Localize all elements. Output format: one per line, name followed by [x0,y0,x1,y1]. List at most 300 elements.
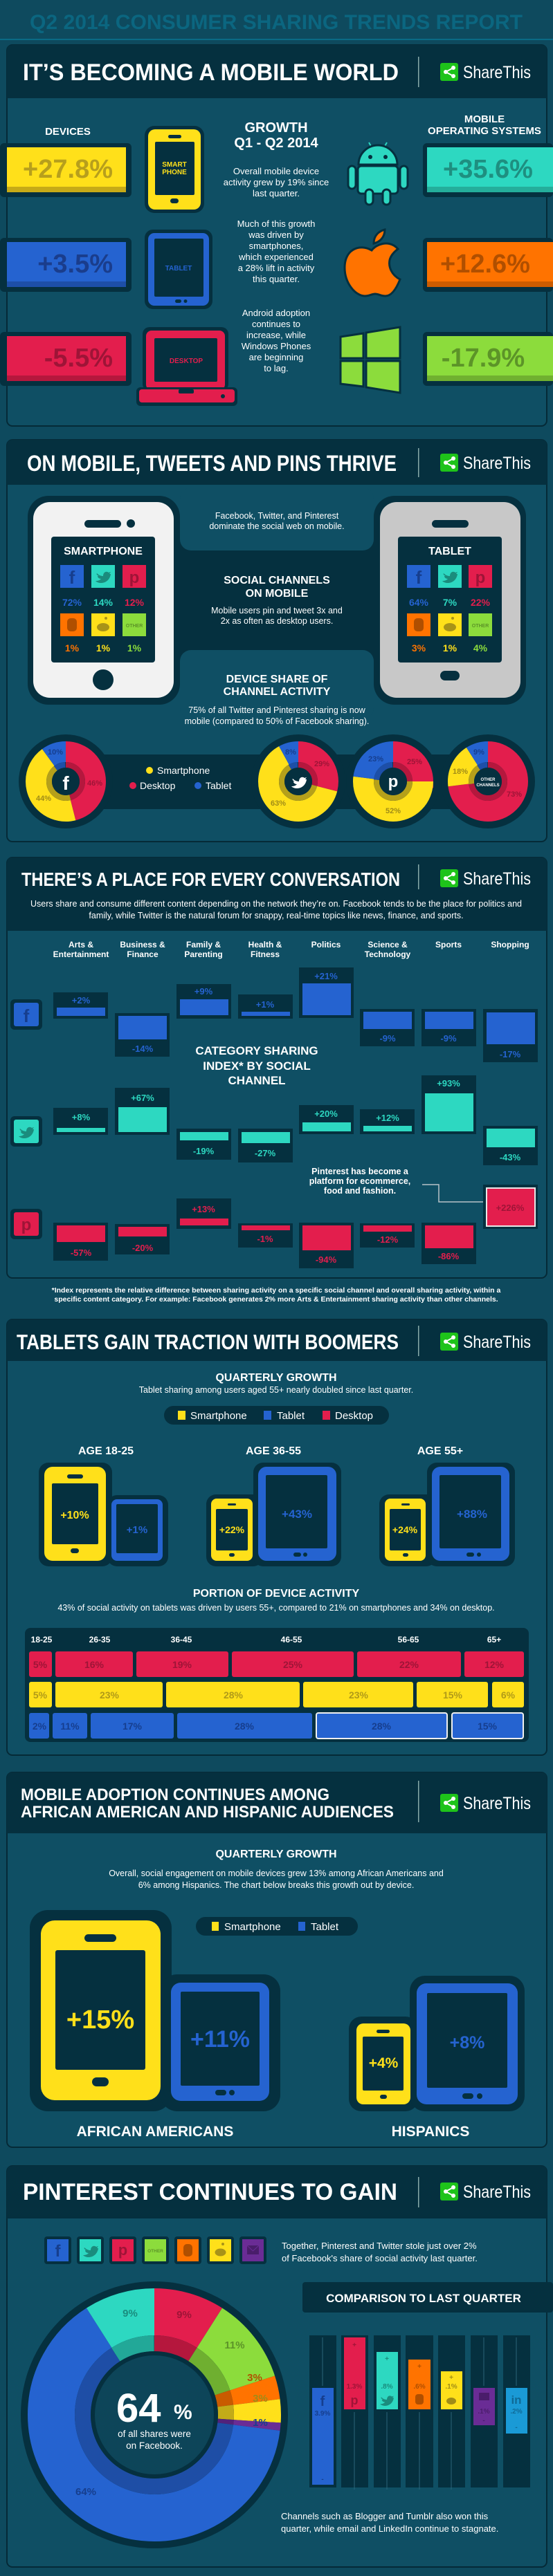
group labels: HISPANICS [392,2124,469,2140]
age labels: AGE 36-55 [246,1445,301,1457]
donut: share of all activity: % [174,2401,192,2424]
phone: smartphone channels: 1% [65,642,80,654]
devices: age 55+: +88% [457,1508,487,1521]
bar chart: change vs last quarter: - [321,2476,324,2483]
bar chart: change vs last quarter: p [350,2393,359,2407]
donut: share of all activity: 9% [176,2309,192,2321]
text: smartphone driven: Much of this growth [237,219,315,229]
table: age share by device: 22% [399,1659,419,1670]
chart: facebook index: +2% [72,995,91,1006]
logo: ShareThis: ShareThis [463,63,531,82]
text: smartphone driven: which experienced [238,252,314,262]
category labels: Shopping [491,940,529,949]
devices: hispanics: +4% [369,2055,399,2071]
phone: tablet channels: 7% [443,597,457,608]
text: social channels on mobile: SOCIAL CHANNELS [224,575,330,586]
bar: tablet +3.5%: +3.5% [37,250,113,279]
chart: pinterest index: +13% [192,1204,215,1214]
devices: age 36-55: +43% [282,1508,312,1521]
panel: boomers [7,1319,547,1755]
icon row: channels: OTHER [147,2249,163,2254]
text: dominate social web [209,511,345,531]
text: blogger and tumblr: quarter, while email and LinkedIn continue to stagnate. [281,2523,498,2534]
table: age share by device: 5% [33,1689,48,1701]
donut: pinterest: p [388,772,398,791]
devices: african americans: +15% [66,2005,134,2035]
table: age share by device: 36-45 [171,1635,192,1644]
table: age share by device: 65+ [487,1635,501,1644]
chart: facebook index: +1% [256,999,275,1010]
text: smartphone driven: this quarter. [253,274,300,284]
table: age share by device: 12% [484,1659,505,1670]
donut band [19,734,535,828]
text: portion of device activity: PORTION OF DEVICE ACTIVITY [193,1588,359,1600]
category labels [53,940,529,959]
text: social channels on mobile [211,575,343,626]
icon: desktop [136,327,237,406]
donut: share of all activity: 1% [253,2417,268,2429]
donut: other channels: 18% [453,768,468,776]
devices: hispanics: +8% [450,2033,484,2053]
legend: device colors: Desktop [140,780,176,791]
donut: facebook: 46% [87,779,102,788]
bar chart: change vs last quarter: + [417,2363,421,2371]
logo: ShareThis [440,1333,531,1352]
phone: tablet channels: p [475,568,485,587]
icon: pinterest row [10,1209,42,1239]
text: overall growth: last quarter. [253,188,300,198]
donut: share of all activity: 3% [253,2393,268,2404]
legend: smartphone tablet [196,1917,358,1936]
header: mobile adoption: AFRICAN AMERICAN AND HISPANIC AUDIENCES [21,1803,394,1822]
bar chart: change vs last quarter: in [511,2393,522,2407]
icon: pinterest row: p [21,1216,31,1234]
legend: smartphone tablet: Smartphone [224,1921,281,1933]
donut: share of all activity: 3% [247,2372,262,2384]
header: mobile world: IT’S BECOMING A MOBILE WORLD [23,59,399,86]
text: social channels on mobile: Mobile users pin and tweet 3x and [211,606,343,615]
phone: smartphone channels: 14% [93,597,114,608]
chart title: category sharing index: INDEX* BY SOCIAL [203,1059,311,1073]
chart: facebook index: -17% [500,1049,521,1059]
subtitle: Users share and consume different content depending on the network they’re on. Facebook tends to be the place for politics and [30,899,522,909]
donut: twitter [269,748,329,811]
header: tweets and pins [7,440,547,485]
chart: pinterest index: -1% [257,1234,273,1244]
category labels: Family & [186,940,221,949]
text: dominate social web: dominate the social web on mobile. [209,521,345,531]
devices: age 18-25: +10% [60,1510,89,1521]
bar chart: change vs last quarter: - [515,2424,518,2431]
devices: age 36-55 [206,1463,341,1566]
logo: ShareThis: ShareThis [463,2183,531,2202]
devices: age 55+: +24% [392,1524,418,1535]
bar: apple +12.6%: +12.6% [440,250,530,279]
bar chart: change vs last quarter: .1% [478,2408,490,2416]
table: age share by device [25,1628,529,1742]
text: android adoption: to lag. [264,363,289,373]
text: quarterly growth: Overall, social engagement on mobile devices grew 13% among African Americans and [109,1869,444,1878]
group labels: AFRICAN AMERICANS [77,2124,233,2140]
chart: facebook index: -14% [132,1044,154,1054]
panel: tweets and pins [7,440,547,842]
header: mobile adoption: MOBILE ADOPTION CONTINUES AMONG [21,1786,329,1804]
bar: desktop -5.5% [0,332,132,386]
chart: twitter index: +93% [437,1078,460,1088]
donut: facebook: f [62,772,69,794]
text: portion of device activity: 43% of social activity on tablets was driven by users 55+, compared to 21% on smartphones and 34% on desktop. [57,1603,495,1613]
chart: pinterest index: -57% [71,1248,92,1258]
table: age share by device: 28% [372,1721,392,1732]
header: boomers [7,1319,547,1361]
icon: twitter row [10,1116,42,1147]
donut: pinterest [363,752,423,815]
text: device share of channel activity: 75% of all Twitter and Pinterest sharing is now [188,705,366,715]
phone: smartphone channels: 1% [96,642,111,654]
chart: facebook index: -9% [379,1033,396,1044]
header: tweets and pins: ON MOBILE, TWEETS AND PINS THRIVE [27,451,397,476]
subtitle: family, while Twitter is the natural forum for snappy, real-time topics like news, finance, and sports. [89,911,464,920]
chart: twitter index: +12% [376,1113,399,1123]
chart: twitter index: -43% [500,1152,521,1162]
callout: pinterest ecommerce: platform for ecommerce, [309,1176,410,1186]
age labels: AGE 18-25 [78,1445,134,1457]
table: age share by device: 11% [60,1721,80,1732]
chart: facebook index: -9% [440,1033,457,1044]
text: device share of channel activity: DEVICE SHARE OF [226,674,328,685]
legend: smartphone tablet: Tablet [311,1921,339,1933]
bar chart: change vs last quarter: 1.3% [347,2383,363,2391]
donut: other channels: CHANNELS [476,784,500,788]
category labels: Science & [368,940,408,949]
icon: smartphone: SMART [162,161,187,169]
text: portion of device activity [57,1588,495,1613]
table: age share by device: 5% [33,1659,48,1670]
category labels: Arts & [69,940,93,949]
group labels [77,2124,469,2140]
callout: pinterest ecommerce: food and fashion. [324,1186,396,1196]
chart: twitter index: -19% [193,1146,215,1156]
logo: ShareThis: ShareThis [463,454,531,473]
footnote [52,1286,501,1304]
phone: smartphone channels: f [69,567,75,588]
chart: pinterest index [53,1185,538,1268]
heading: comparison to last quarter [302,2282,553,2313]
text: smartphone driven [237,219,315,284]
phone: smartphone channels: OTHER [126,624,143,629]
table: age share by device: 19% [172,1659,192,1670]
text: device share of channel activity [185,674,369,726]
legend: device colors: Smartphone [190,1410,247,1422]
devices: age 55+ [379,1463,515,1566]
chart: twitter index: +20% [314,1109,338,1119]
chart: facebook index: +9% [194,986,213,997]
logo: ShareThis [440,2183,531,2202]
text: device share of channel activity: mobile (compared to 50% of Facebook sharing). [185,716,369,726]
devices: age 18-25 [39,1463,168,1566]
header: every conversation: THERE’S A PLACE FOR EVERY CONVERSATION [21,869,400,890]
text: quarterly growth [139,1372,413,1395]
donut: other channels [453,748,522,811]
table: age share by device: 23% [100,1689,120,1701]
mobile OS label [428,113,541,137]
chart: twitter index: +8% [72,1112,91,1122]
bar chart: change vs last quarter [309,2335,530,2490]
bar chart: change vs last quarter: .1% [445,2383,457,2391]
icon: smartphone: PHONE [162,169,187,176]
phone: tablet channels [374,496,526,705]
devices label: DEVICES [45,126,91,138]
chart: pinterest index: -94% [316,1254,337,1265]
devices: hispanics [349,1976,525,2111]
text: blogger and tumblr: Channels such as Blogger and Tumblr also won this [281,2511,489,2521]
panel: pinterest continues to gain [7,2166,553,2567]
icon: android [348,142,408,205]
header: every conversation [7,858,547,931]
table: age share by device: 6% [501,1689,516,1701]
bar chart: change vs last quarter: .8% [381,2383,393,2391]
text: quarterly growth [109,1848,444,1890]
devices: african americans: +11% [190,2026,250,2053]
text: quarterly growth: QUARTERLY GROWTH [215,1848,337,1860]
donut: share of all activity: 11% [224,2339,245,2351]
report title: Q2 2014 CONSUMER SHARING TRENDS REPORT [30,11,523,34]
text: android adoption: Android adoption [242,308,310,318]
category labels: Politics [311,940,341,949]
chart: twitter index: -27% [255,1148,276,1158]
devices: age 36-55: +22% [219,1524,245,1535]
chart: pinterest index: +226% [496,1203,525,1213]
callout: pinterest ecommerce [309,1167,486,1202]
text: overall growth: Overall mobile device [233,166,319,176]
bar: windows -17.9% [423,332,553,386]
devices: african americans [30,1910,280,2111]
icon: windows [341,327,400,393]
table: age share by device: 16% [84,1659,105,1670]
phone: tablet channels: 22% [471,597,491,608]
chart: pinterest index: -20% [132,1243,154,1253]
category labels: Entertainment [53,949,109,959]
icon: tablet: TABLET [165,265,192,272]
icon: facebook row [10,999,42,1030]
category labels: Parenting [184,949,223,959]
text: dominate social web: Facebook, Twitter, and Pinterest [215,511,339,521]
logo: ShareThis [440,1794,531,1813]
category labels: Fitness [251,949,280,959]
category labels: Technology [365,949,411,959]
legend: device colors: Desktop [335,1410,373,1422]
logo: ShareThis: ShareThis [463,869,531,889]
devices: age 18-25: +1% [127,1524,147,1536]
header: mobile world [7,45,547,98]
category labels: Business & [120,940,165,949]
category labels: Finance [127,949,158,959]
panel: every conversation [7,858,547,1278]
donut: share of all activity: 9% [123,2308,138,2319]
footnote: *Index represents the relative difference between sharing activity on a specific social channel and overall sharing activity, within a [52,1286,501,1295]
text: stole share [282,2241,478,2263]
bar chart: change vs last quarter: + [352,2342,356,2349]
header: pinterest gain [7,2166,547,2218]
callout: pinterest ecommerce: Pinterest has become a [311,1167,409,1176]
donut: share of all activity: on Facebook. [126,2440,183,2451]
table: age share by device: 15% [478,1721,498,1732]
header: pinterest gain: PINTEREST CONTINUES TO GAIN [23,2179,397,2205]
bar chart: change vs last quarter: .6% [413,2383,426,2391]
panel: mobile world [0,45,553,426]
text: android adoption [242,308,311,373]
donut: twitter: 63% [271,799,286,808]
donut: share of all activity [21,2281,288,2548]
text: stole share: of Facebook's share of social activity last quarter. [282,2253,478,2263]
text: overall growth [224,166,329,198]
mobile OS label: MOBILE [464,113,505,125]
text: quarterly growth: QUARTERLY GROWTH [215,1372,337,1384]
chart: pinterest index: -12% [377,1234,399,1245]
text: android adoption: continues to [252,319,300,329]
text: social channels on mobile: ON MOBILE [246,588,309,600]
text: smartphone driven: smartphones, [249,241,303,251]
donut: pinterest: 23% [368,755,383,763]
phone: smartphone channels: 12% [125,597,145,608]
icon: smartphone [145,126,204,213]
donut: pinterest: 52% [386,807,401,815]
bar: tablet +3.5% [0,238,132,292]
panel: african american and hispanic [7,1772,547,2147]
logo: ShareThis [440,869,531,889]
header: mobile adoption [7,1772,547,1833]
legend: device colors [164,1406,389,1425]
donut: facebook [36,748,102,811]
phone: smartphone channels: 72% [62,597,82,608]
chart: pinterest index: -86% [438,1251,460,1261]
bar: smartphone +27.8%: +27.8% [23,155,113,184]
bar: android +35.6%: +35.6% [443,155,533,184]
table: age share by device: 56-65 [398,1635,419,1644]
table: age share by device: 28% [224,1689,244,1701]
icon: tablet [145,230,212,309]
bar: desktop -5.5%: -5.5% [44,344,113,373]
phone: tablet channels: 1% [443,642,457,654]
donut: twitter: 29% [314,760,329,768]
phone: smartphone channels [28,496,180,705]
bar chart: change vs last quarter: f [320,2394,325,2409]
table: age share by device: 2% [33,1721,47,1732]
chart: facebook index: +21% [314,971,338,981]
legend: device colors: Tablet [206,780,231,791]
donut: twitter: 8% [285,748,296,757]
growth heading [234,120,318,151]
donut: share of all activity: 64 [116,2386,161,2431]
phone: smartphone channels: SMARTPHONE [64,546,143,557]
bar chart: change vs last quarter: 3.9% [315,2410,331,2418]
phone: tablet channels: OTHER [472,624,489,629]
mobile OS label: OPERATING SYSTEMS [428,125,541,137]
icon: apple [345,230,400,296]
subtitle [30,899,522,920]
donut: facebook: 10% [48,748,63,757]
donut: facebook: 44% [36,795,51,803]
text: social channels on mobile: 2x as often as desktop users. [221,616,333,626]
icon row: channels [44,2236,266,2264]
bar: smartphone +27.8% [0,143,132,197]
donut: pinterest: 25% [407,758,422,766]
growth heading: GROWTH [244,120,308,136]
phone: tablet channels: f [416,567,422,588]
phone: tablet channels: 3% [412,642,426,654]
table: age share by device: 17% [123,1721,143,1732]
donut: other channels: 9% [473,748,484,757]
text: blogger and tumblr [281,2511,498,2534]
phone: tablet channels: 4% [473,642,488,654]
table: age share by device: 25% [283,1659,303,1670]
phone: tablet channels: 64% [409,597,429,608]
text: quarterly growth: 6% among Hispanics. The chart below breaks this growth out by device. [138,1880,414,1890]
bar: android +35.6% [423,143,553,197]
bar: apple +12.6% [423,238,553,292]
text: overall growth: activity grew by 19% since [224,177,329,187]
phone: tablet channels: TABLET [428,546,471,557]
bar chart: change vs last quarter: + [449,2374,453,2382]
legend: device colors: Smartphone [157,765,210,776]
icon row: channels: f [55,2242,61,2261]
logo: ShareThis [440,454,531,473]
phone: smartphone channels: p [129,568,139,587]
donut: other channels: OTHER [480,778,496,782]
chart title: category sharing index: CHANNEL [228,1074,286,1087]
category labels: Sports [435,940,462,949]
growth heading: Q1 - Q2 2014 [234,136,318,151]
bar chart: change vs last quarter: + [385,2355,389,2363]
chart title: category sharing index [195,1044,318,1087]
bar chart: change vs last quarter: - [482,2417,485,2425]
bar chart: change vs last quarter: .2% [510,2408,523,2416]
table: age share by device: 46-55 [281,1635,302,1644]
legend: device colors [129,765,231,791]
logo: ShareThis [440,63,531,82]
age labels: AGE 55+ [417,1445,463,1457]
text: stole share: Together, Pinterest and Twitter stole just over 2% [282,2241,477,2251]
text: android adoption: are beginning [249,352,303,362]
heading: comparison to last quarter: COMPARISON TO LAST QUARTER [326,2292,521,2305]
connector between phones [170,532,384,664]
icon: desktop: DESKTOP [170,358,203,365]
donut: share of all activity: of all shares were [118,2429,191,2439]
donut: other channels: 73% [507,790,522,799]
icon: facebook row: f [24,1006,30,1026]
chart: twitter index: +67% [131,1093,154,1103]
text: smartphone driven: a 28% lift in activity [238,263,315,273]
table: age share by device: 15% [443,1689,463,1701]
text: device share of channel activity: CHANNEL ACTIVITY [224,686,331,698]
phone: smartphone channels: 1% [127,642,142,654]
logo: ShareThis: ShareThis [463,1794,531,1813]
donut: share of all activity: 64% [75,2486,96,2498]
text: smartphone driven: was driven by [248,230,304,240]
icon row: channels: p [118,2241,127,2259]
header: boomers: TABLETS GAIN TRACTION WITH BOOMERS [17,1330,399,1354]
chart: twitter index [53,1075,538,1165]
chart title: category sharing index: CATEGORY SHARING [195,1044,318,1057]
logo: ShareThis: ShareThis [463,1333,531,1352]
text: android adoption: increase, while [246,330,306,340]
table: age share by device: 26-35 [89,1635,111,1644]
text: quarterly growth: Tablet sharing among users aged 55+ nearly doubled since last quarter. [139,1385,413,1395]
age labels [78,1445,463,1457]
chart: facebook index [53,967,538,1062]
text: android adoption: Windows Phones [242,341,311,351]
category labels: Health & [248,940,282,949]
